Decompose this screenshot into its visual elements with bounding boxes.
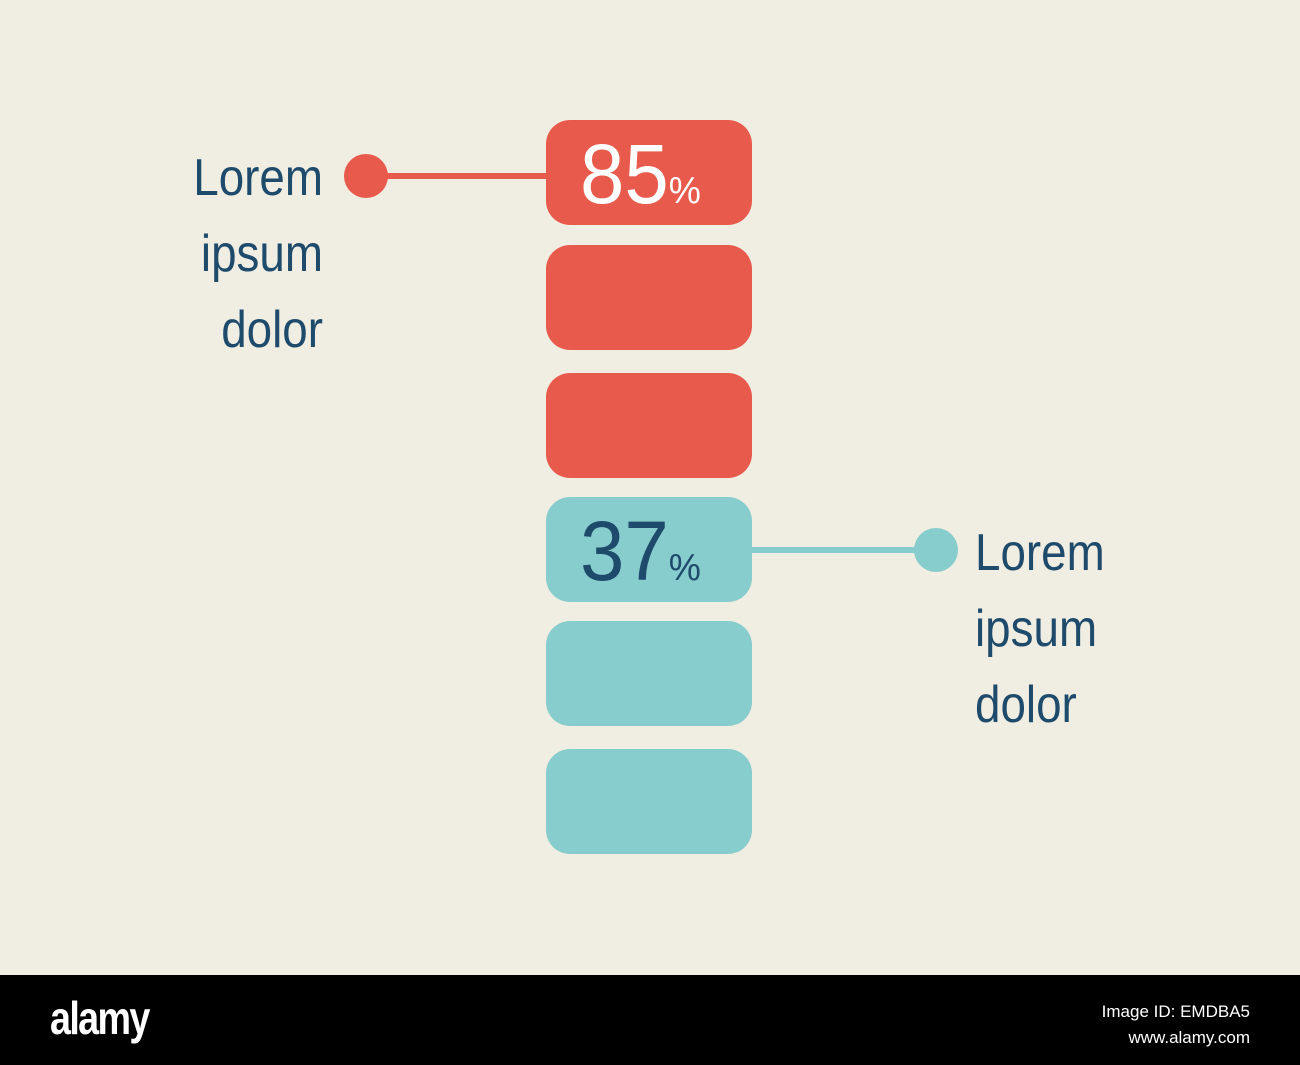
box 1 red with 85%: 85% (580, 127, 701, 221)
box 5 teal (546, 621, 752, 726)
footer id: www.alamy.com (1128, 1028, 1250, 1047)
label right: Lorem (975, 524, 1105, 582)
box 1 red with 85% (546, 120, 752, 225)
box 4 teal with 37%: 37% (580, 504, 701, 598)
footer bar (0, 975, 1300, 1065)
box 2 red (546, 245, 752, 350)
label left: Lorem (193, 149, 323, 207)
footer id (1102, 1002, 1250, 1047)
label right: dolor (975, 676, 1077, 734)
bar column (546, 120, 752, 854)
label left: ipsum (201, 225, 323, 283)
footer id: Image ID: EMDBA5 (1102, 1002, 1250, 1021)
label right (975, 524, 1105, 734)
label left: dolor (221, 301, 323, 359)
connector left (344, 154, 546, 198)
box 3 red (546, 373, 752, 478)
box 4 teal with 37% (546, 497, 752, 602)
label left (193, 149, 323, 359)
connector right (752, 528, 958, 572)
footer logo: alamy (50, 992, 149, 1044)
label right: ipsum (975, 600, 1097, 658)
box 6 teal (546, 749, 752, 854)
